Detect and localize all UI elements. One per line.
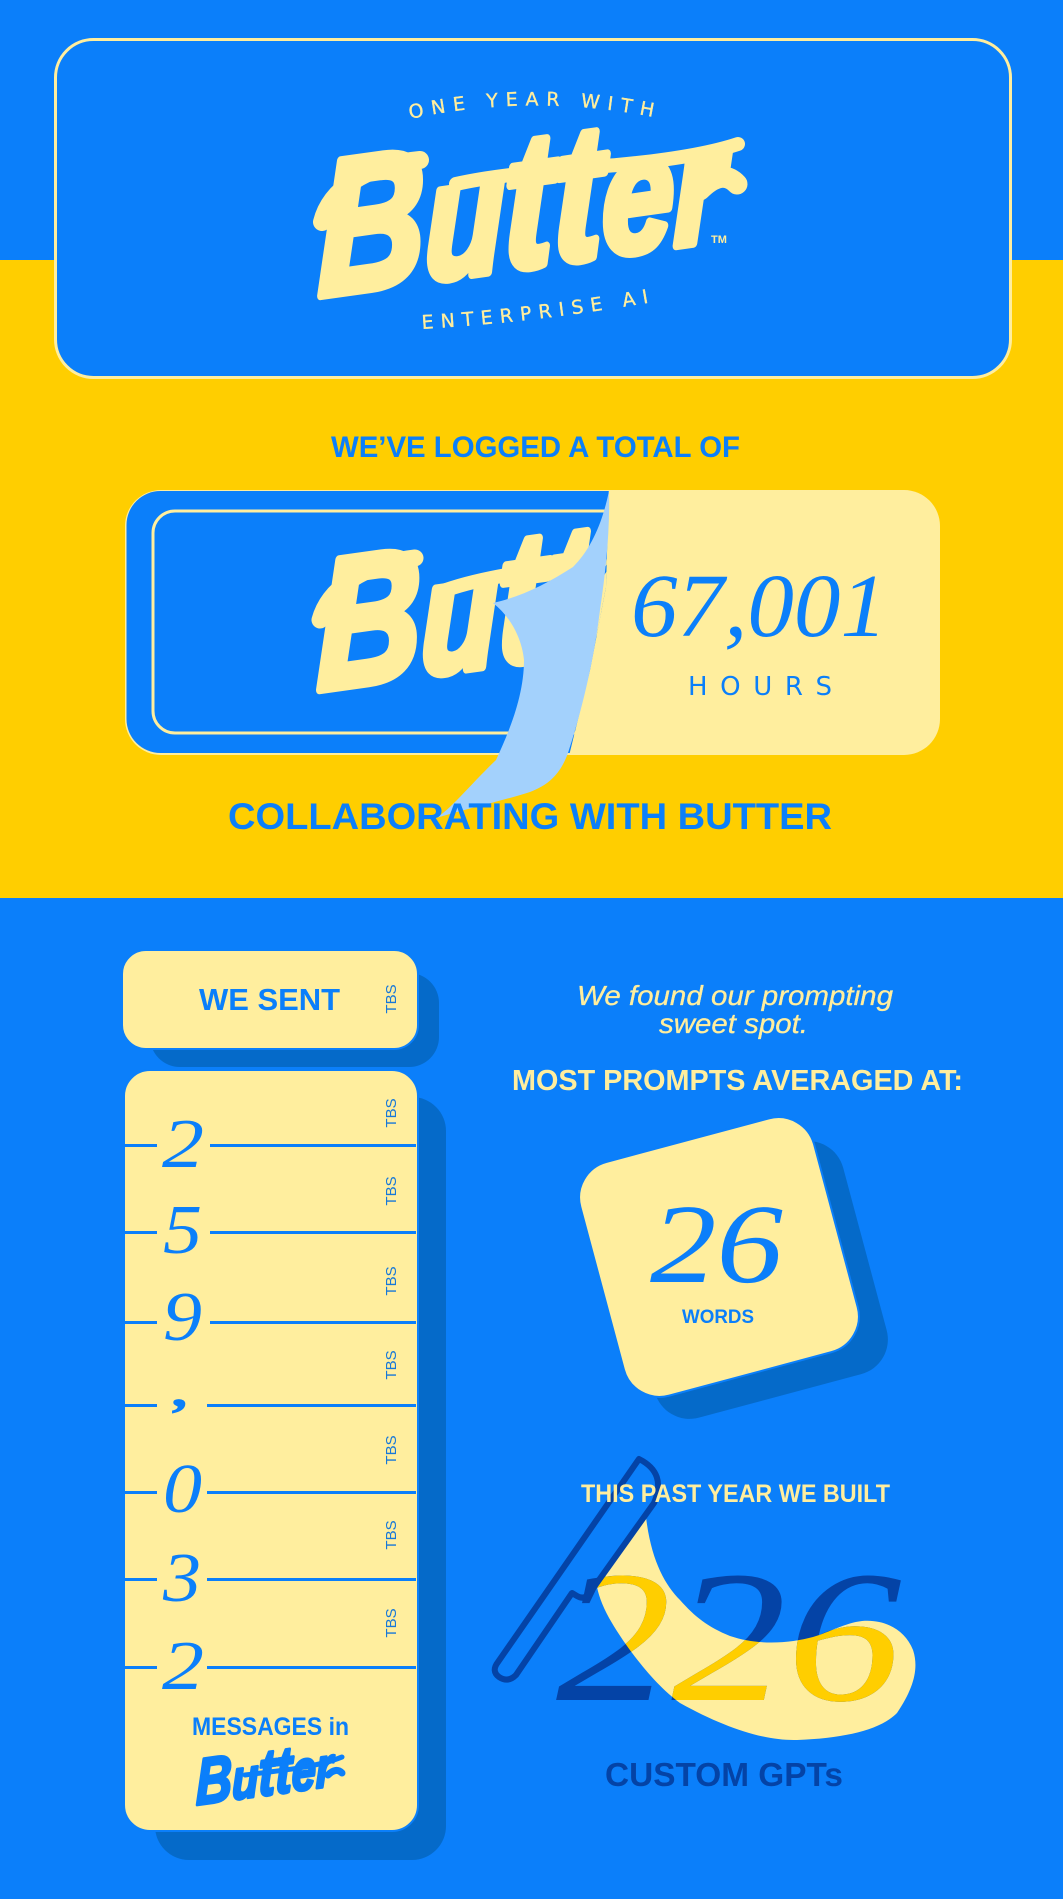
digits: 259,032: 0 [163,1451,202,1528]
heading: this past year we built: THIS PAST YEAR WE BUILT [581,1480,890,1508]
tick labels: TBS [383,1350,400,1380]
label: custom gpts: CUSTOM GPTs [605,1756,843,1793]
trademark: TM [711,234,727,246]
heading: most prompts averaged at: MOST PROMPTS AVERAGED AT: [512,1065,963,1097]
logo swash: crossbar [456,144,738,184]
logo swash: r terminal [700,177,737,190]
background: yellow band [0,260,1063,898]
stat: 26: 26 [650,1182,783,1307]
tick labels: TBS [383,1608,400,1638]
butter curl [597,1517,915,1740]
tick labels: TBS [383,1098,400,1128]
digits: 259,032: 3 [162,1540,201,1617]
label: messages in: MESSAGES in [192,1713,349,1741]
wrapper peeled away: Butter [317,467,717,729]
panel: messages butter stick [124,1070,446,1860]
digits: 259,032: 2 [162,1628,204,1705]
stat overlay on butter: 226 [556,1532,902,1741]
logo swash: small crossbar [245,1757,342,1775]
background: lower blue section [0,898,1063,1899]
tick labels: TBS [383,1266,400,1296]
panel: hours butter stick [125,467,940,818]
butter stick body [125,490,940,755]
tick label: TBS [383,984,400,1014]
panel: custom gpts [495,1459,915,1793]
peeled wrapper flap [436,491,609,818]
tick labels: TBS [383,1176,400,1206]
digits: 259,032: 9 [163,1279,202,1356]
label: we sent: WE SENT [199,982,340,1017]
logo: small Butter: Butter [196,1726,335,1819]
label: hours: HOURS [688,672,832,702]
background: top blue band [0,0,1063,260]
wrapper peeled away [126,491,609,753]
logo: Butter: Butter [318,65,731,337]
logo swash: B top stroke [322,160,420,222]
tick labels [383,1098,400,1638]
digits: 259,032: 2 [162,1106,204,1183]
text: prompting sweet spot: We found our prompting [577,980,893,1011]
tick labels: TBS [383,1520,400,1550]
tick labels: TBS [383,1435,400,1465]
digits: 259,032 [162,1106,204,1705]
heading: we've logged a total of: WE’VE LOGGED A TOTAL OF [331,431,740,464]
subheading: enterprise ai: ENTERPRISE AI [422,289,648,329]
panel: title card [54,38,1012,379]
heading: collaborating with butter: COLLABORATING WITH BUTTER [228,796,832,837]
icon: butter knife [495,1459,658,1680]
panel: we sent tab [122,950,439,1067]
logo swash: small r terminal [328,1770,342,1775]
label: words: WORDS [682,1307,754,1328]
stat: 226: 226 [556,1532,902,1741]
stat: 67,001: 67,001 [631,557,887,656]
digits: 259,032: , [173,1367,190,1416]
digits: 259,032: 5 [163,1192,202,1269]
heading: one year with: ONE YEAR WITH [409,92,654,118]
text: prompting sweet spot: sweet spot. [659,1008,808,1039]
text: prompting sweet spot [577,980,893,1039]
panel: 26 words butter pat [571,1109,896,1427]
